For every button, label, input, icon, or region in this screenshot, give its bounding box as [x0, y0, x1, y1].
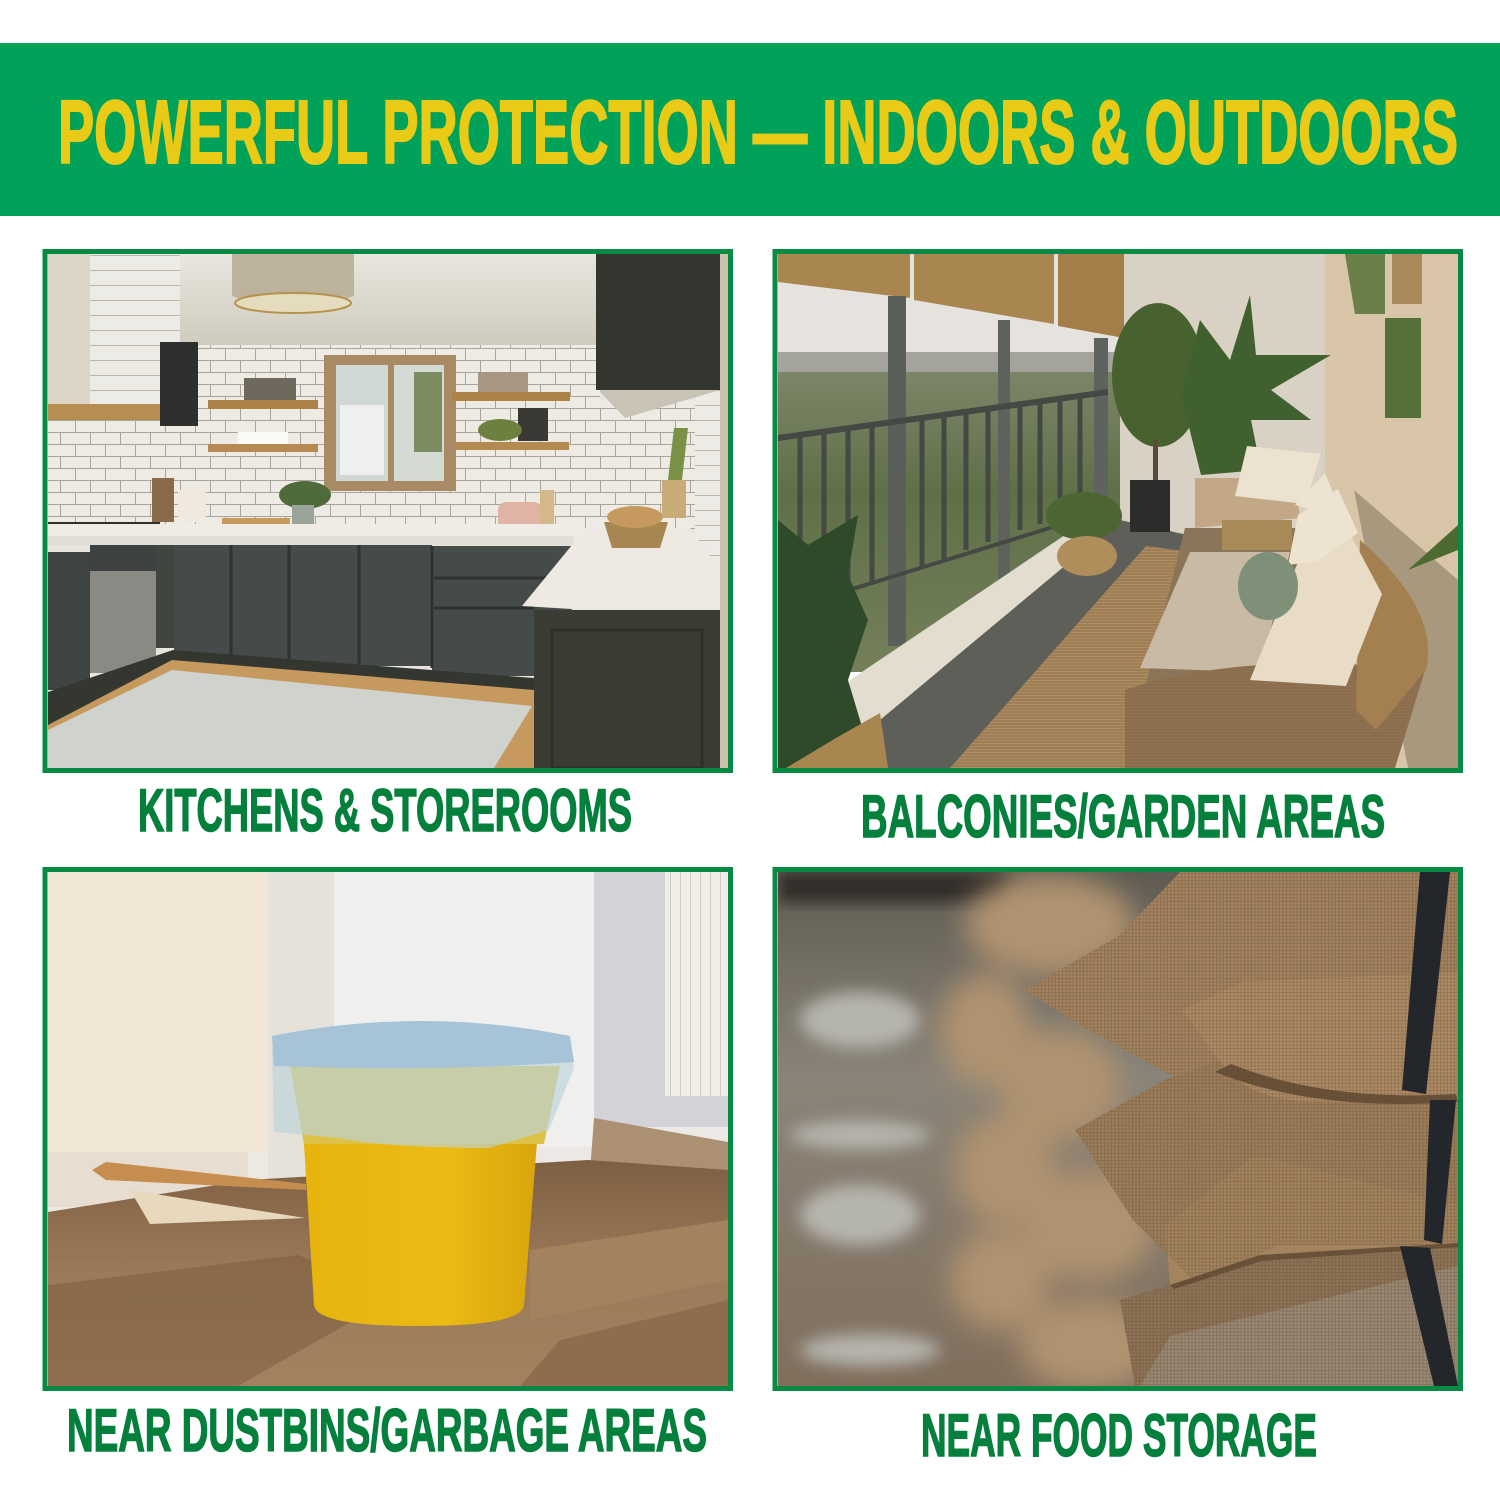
- caption: kitchens: KITCHENS & STOREROOMS: [138, 777, 632, 844]
- burlap texture: [1025, 872, 1458, 1386]
- blinds: [778, 254, 910, 298]
- panel: balcony photo: [778, 254, 1458, 768]
- railing: [778, 392, 1108, 612]
- counter: [522, 528, 720, 609]
- title banner: [0, 43, 1500, 216]
- shelves: [208, 400, 318, 409]
- caption: dustbins: NEAR DUSTBINS/GARBAGE AREAS: [67, 1397, 707, 1464]
- pot + plants: [1046, 492, 1122, 540]
- window: [324, 355, 456, 491]
- bin: [304, 1142, 537, 1326]
- floor: [48, 1160, 728, 1386]
- sofa: [1195, 478, 1300, 528]
- basket and greens on the counter: [604, 428, 688, 548]
- panel: kitchen photo: [48, 254, 728, 768]
- base cabinets: [48, 552, 90, 690]
- panel frame: dustbin: [45, 870, 730, 1388]
- panel: sandbags photo: [778, 872, 1458, 1390]
- panel frame: balcony: [775, 252, 1460, 770]
- deck: [850, 536, 1072, 724]
- bags: [1026, 872, 1458, 1076]
- panel: dustbin photo: [48, 872, 728, 1386]
- scoop: [130, 1190, 305, 1224]
- counter items: [279, 481, 331, 509]
- posts: [888, 296, 906, 646]
- straps: [1402, 872, 1450, 1094]
- plinth, floor and rug: [48, 650, 534, 725]
- panel frame: sandbags: [775, 870, 1460, 1388]
- panel frame: kitchen: [45, 252, 730, 770]
